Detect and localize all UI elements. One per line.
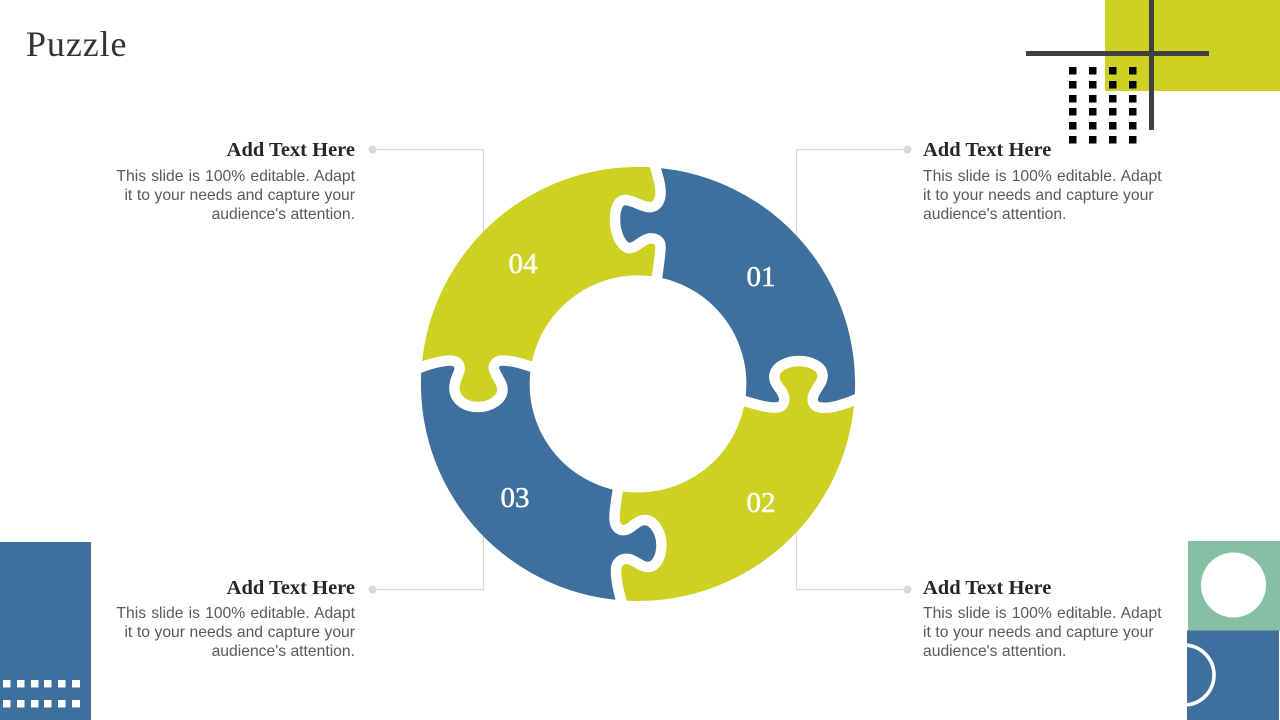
text block: bottom left: it to your needs and capture your	[124, 624, 355, 641]
connector: bottom right	[796, 530, 912, 594]
connector: top right	[796, 146, 912, 240]
text block: top right: Add Text Here	[923, 139, 1051, 161]
bottom right decoration	[1187, 541, 1280, 720]
text block: top left: Add Text Here	[227, 139, 355, 161]
title: Puzzle	[26, 24, 127, 64]
text block: top right: audience's attention.	[923, 206, 1066, 223]
text block: bottom right: Add Text Here	[923, 577, 1051, 599]
bottom left decoration	[0, 542, 91, 720]
top right decoration	[1026, 0, 1280, 144]
text block: top right: it to your needs and capture your	[923, 187, 1154, 204]
text block: top left: audience's attention.	[212, 206, 355, 223]
text block: top left: it to your needs and capture your	[124, 187, 355, 204]
number 04: 04	[508, 248, 538, 280]
connector: top left	[368, 146, 484, 240]
number 02: 02	[746, 487, 776, 519]
text block: bottom left: audience's attention.	[212, 643, 355, 660]
text block: top left	[116, 139, 356, 223]
connector: bottom left	[368, 530, 484, 594]
text block: bottom right: This slide is 100% editable. Adapt	[923, 605, 1162, 622]
text block: bottom right	[923, 577, 1162, 660]
text block: bottom right: it to your needs and capture your	[923, 624, 1154, 641]
puzzle piece 04	[422, 167, 661, 407]
text block: top right: This slide is 100% editable. Adapt	[923, 168, 1162, 185]
number 03: 03	[500, 482, 530, 514]
text block: bottom left: Add Text Here	[227, 577, 355, 599]
text block: top right	[923, 139, 1162, 223]
white seams between pieces	[414, 160, 862, 607]
puzzle piece 02	[614, 361, 854, 601]
text block: bottom left	[116, 577, 356, 660]
text block: bottom left: This slide is 100% editable. Adapt	[116, 605, 356, 622]
puzzle ring	[414, 160, 862, 607]
puzzle piece 01	[615, 168, 855, 408]
text block: top left: This slide is 100% editable. Adapt	[116, 168, 356, 185]
number 01: 01	[746, 261, 776, 293]
puzzle piece 03	[421, 360, 662, 600]
text block: bottom right: audience's attention.	[923, 643, 1066, 660]
